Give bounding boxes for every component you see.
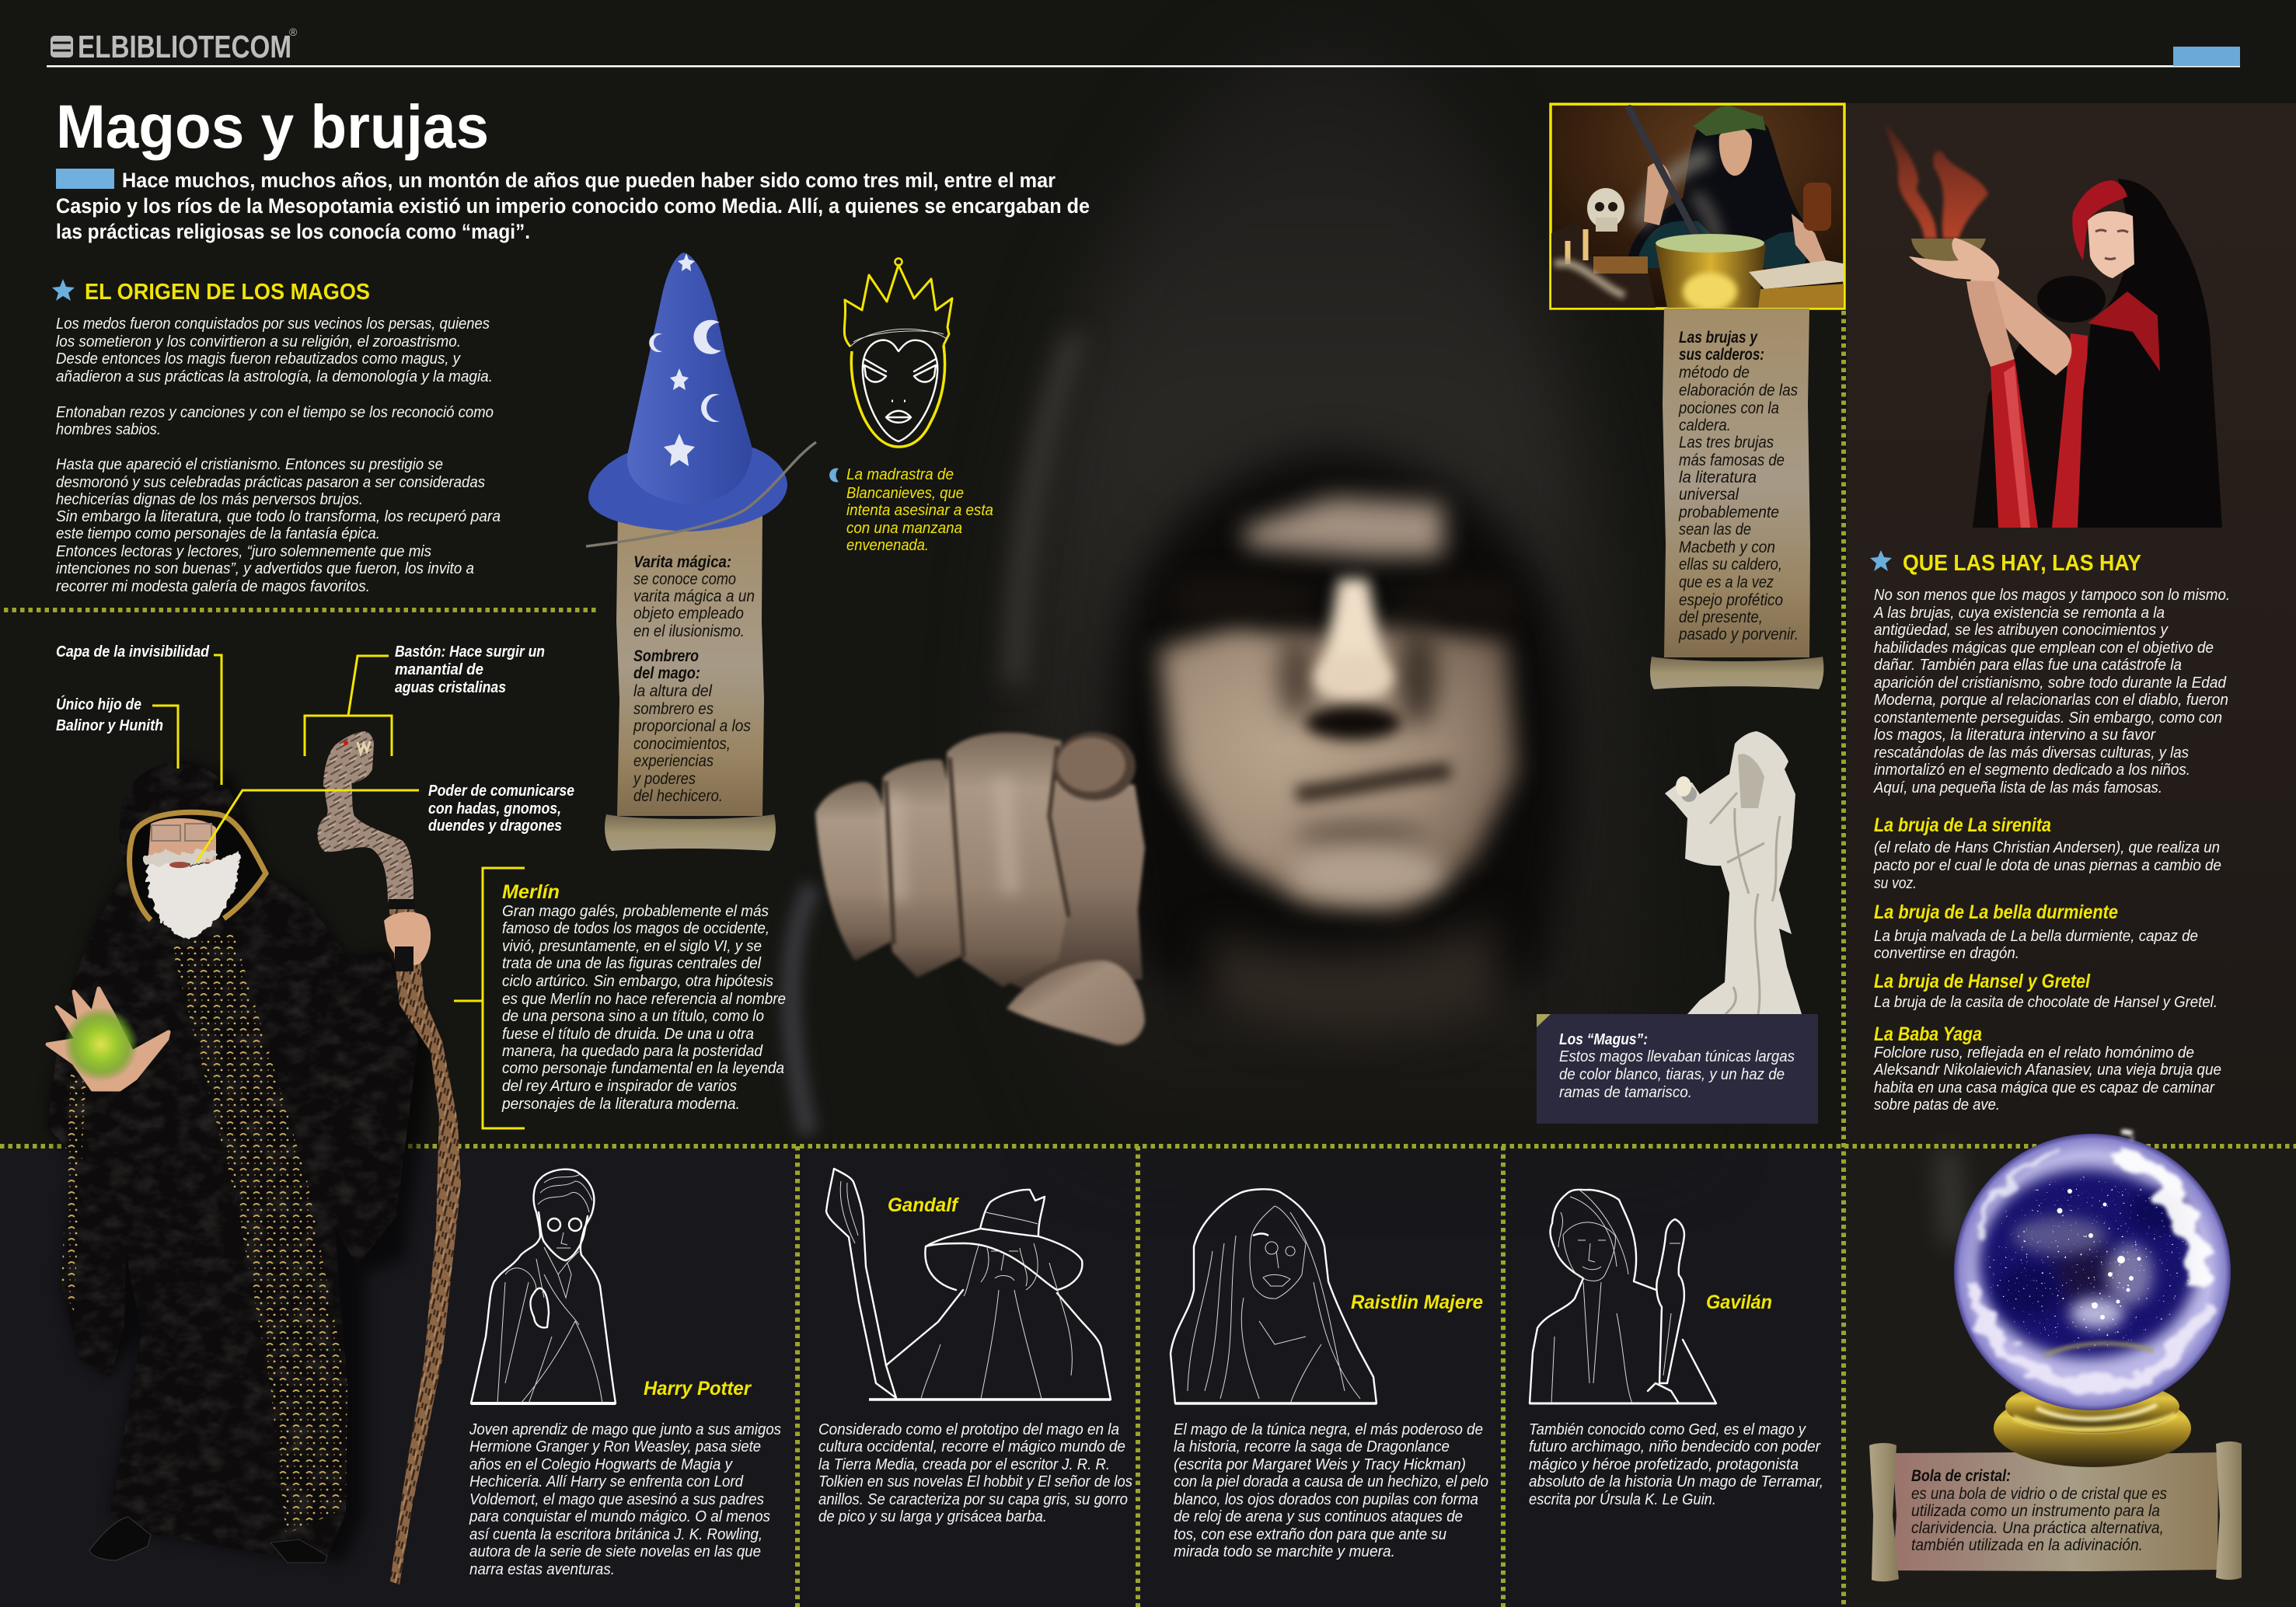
photo: white magus statue xyxy=(1665,731,1802,1014)
hood opening and trim xyxy=(130,812,266,920)
bun xyxy=(2037,276,2106,322)
callout: poder: duendes y dragones xyxy=(428,817,562,835)
thumb and palm under xyxy=(972,777,1145,995)
text: raistlin xyxy=(1174,1421,1488,1560)
header rule and blue tab xyxy=(47,47,2240,67)
scroll: brujas y calderos: que es a la vez xyxy=(1679,573,1774,591)
text: harry potter: Hechicería. Allí Harry se enfrenta con Lord xyxy=(469,1473,744,1490)
heading: que las hay: QUE LAS HAY, LAS HAY xyxy=(1903,551,2141,576)
header logo: ® xyxy=(289,26,298,38)
text: harry potter xyxy=(469,1421,781,1578)
scroll: brujas y calderos: ellas su caldero, xyxy=(1679,556,1782,573)
witch entry: hansel y gretel xyxy=(1874,971,2217,1011)
scroll: bola de cristal xyxy=(1869,1441,2242,1581)
panel: Merlin text with bracket: trata de una de las figuras centrales del xyxy=(502,954,762,972)
scroll: varita magica and sombrero: experiencias xyxy=(633,752,714,770)
text block: witches intro: inmortalizó en el segmento dedicado a los niños. xyxy=(1874,761,2190,779)
arms xyxy=(1970,263,2071,375)
text: raistlin: de reloj de arena y sus continuos ataques de xyxy=(1174,1508,1463,1525)
witch entry: baba yaga: habita en una casa mágica que es capaz de caminar xyxy=(1874,1079,2215,1096)
caption: la madrastra: La madrastra de xyxy=(846,465,954,483)
text: gandalf: anillos. Se caracteriza por su capa gris, su gorro xyxy=(818,1490,1128,1508)
hood xyxy=(1012,39,1687,1142)
icon: wand xyxy=(586,442,816,546)
text: harry potter: Joven aprendiz de mago que junto a sus amigos xyxy=(469,1421,781,1438)
witch entry: baba yaga: Folclore ruso, reflejada en el relato homónimo de xyxy=(1874,1044,2194,1061)
skull xyxy=(1587,188,1624,232)
text: gandalf: la Tierra Media, creada por el escritor J. R. R. xyxy=(818,1455,1110,1473)
callout: capa: Capa de la invisibilidad xyxy=(56,643,209,661)
callout: baston: aguas cristalinas xyxy=(395,678,506,696)
face xyxy=(1159,497,1516,1037)
scroll: brujas y calderos: Las tres brujas xyxy=(1679,434,1774,451)
text: harry potter: Voldemort, el mago que asesinó a sus padres xyxy=(469,1490,764,1508)
panel: Merlin text with bracket: famoso de todos los magos de occidente, xyxy=(502,919,769,937)
cauldron xyxy=(1656,236,1766,308)
caption: la madrastra: intenta asesinar a esta xyxy=(846,501,993,519)
scroll: varita magica and sombrero: se conoce como xyxy=(633,570,736,588)
text: raistlin: tos, con ese extraño don para que ante su xyxy=(1174,1525,1446,1543)
label: raistlin: Raistlin Majere xyxy=(1351,1292,1483,1313)
text block: witches intro: rescatándolas de las más diversas culturas, y las xyxy=(1874,744,2189,762)
text block: witches intro: No son menos que los magos y tampoco son lo mismo. xyxy=(1874,586,2230,604)
text block: origin of magi: Sin embargo la literatura, que todo lo transforma, los recuperó para xyxy=(56,507,501,525)
text block: witches intro: constantemente perseguidas. Sin embargo, como con xyxy=(1874,709,2222,727)
photo: witch with cauldron xyxy=(1551,104,1847,310)
intro paragraph: las prácticas religiosas se los conocía como “magi”. xyxy=(56,220,530,243)
scroll: varita magica and sombrero: del hechicero. xyxy=(633,787,723,805)
text block: origin of magi: Los medos fueron conquistados por sus vecinos los persas, quienes xyxy=(56,315,490,333)
text block: witches intro: Moderna, porque al relacionarlas con el diablo, fueron xyxy=(1874,691,2228,709)
robe xyxy=(47,761,418,1560)
text block: witches intro: dañar. También para ellas fue una catástrofe la xyxy=(1874,656,2182,674)
scroll: bola de cristal: utilizada como un instrumento para la xyxy=(1911,1502,2160,1520)
smoke xyxy=(1884,121,1988,239)
text: harry potter: autora de la serie de siete novelas en las que xyxy=(469,1543,761,1560)
panel: Merlin text with bracket: Gran mago galés, probablemente el más xyxy=(502,902,769,920)
text block: witches intro: antigüedad, se les atribuyen conocimientos y xyxy=(1874,621,2169,639)
wizard shadow xyxy=(47,761,435,1562)
witch entry: hansel y gretel: La bruja de la casita de chocolate de Hansel y Gretel. xyxy=(1874,993,2217,1011)
witch entry: baba yaga xyxy=(1872,1023,2221,1114)
line art: Gandalf xyxy=(826,1169,1111,1400)
text: gavilan xyxy=(1529,1421,1823,1508)
hood and cape xyxy=(2078,179,2222,528)
callout box: los magus: ramas de tamarisco. xyxy=(1559,1083,1692,1101)
crystal ball stand xyxy=(1994,1380,2191,1467)
text block: origin of magi xyxy=(56,315,501,595)
title: Magos y brujas xyxy=(56,92,489,161)
sleeve highlight xyxy=(791,886,812,1135)
scroll: varita magica and sombrero: del mago: xyxy=(633,664,700,682)
text: gavilan: escrita por Úrsula K. Le Guin. xyxy=(1529,1490,1716,1508)
panel: Merlin text with bracket: ciclo artúrico. Sin embargo, otra hipótesis xyxy=(502,972,773,990)
callout: poder xyxy=(428,782,574,835)
scroll: brujas y calderos: espejo profético xyxy=(1679,591,1783,609)
panel: Merlin text with bracket: como personaje fundamental en la leyenda xyxy=(502,1059,784,1077)
red dress xyxy=(1991,333,2088,528)
witch entry: la sirenita: su voz. xyxy=(1874,874,1917,892)
table items xyxy=(1551,221,1656,308)
text block: origin of magi: Entonaban rezos y canciones y con el tiempo se los reconoció como xyxy=(56,403,494,421)
line art: Gavilan xyxy=(1530,1189,1716,1403)
scroll: varita magica and sombrero: en el ilusionismo. xyxy=(633,622,745,640)
shoes xyxy=(89,1517,151,1560)
text: raistlin: El mago de la túnica negra, el más poderoso de xyxy=(1174,1421,1483,1438)
scroll: brujas y calderos: elaboración de las xyxy=(1679,382,1798,399)
caption: la madrastra: con una manzana xyxy=(846,519,962,537)
line art: evil queen xyxy=(844,258,952,447)
scroll: brujas y calderos: caldera. xyxy=(1679,417,1731,434)
callout box: los magus: Los “Magus”: xyxy=(1559,1030,1648,1048)
panel: Merlin text with bracket: Merlín xyxy=(502,881,560,903)
text: gavilan: futuro archimago, niño bendecido con poder xyxy=(1529,1438,1821,1455)
text: harry potter: años en el Colegio Hogwarts de Magia y xyxy=(469,1455,734,1473)
panel: Merlin text with bracket: vivió, presuntamente, en el siglo VI, y se xyxy=(502,937,762,955)
callout lines xyxy=(152,655,419,862)
line art: Raistlin Majere xyxy=(1171,1189,1377,1403)
book xyxy=(1749,260,1847,289)
scroll: brujas y calderos: pociones con la xyxy=(1678,399,1779,417)
icon: blue wizard hat with wand xyxy=(588,253,787,532)
scroll: bola de cristal: clarividencia. Una práctica alternativa, xyxy=(1911,1519,2164,1537)
text: gandalf xyxy=(818,1421,1132,1525)
text: harry potter: así cuenta la escritora británica J. K. Rowling, xyxy=(469,1525,762,1543)
scroll: brujas y calderos: del presente, xyxy=(1679,608,1763,626)
scroll: brujas y calderos xyxy=(1650,309,1823,689)
bowl xyxy=(1911,239,1986,266)
label: harry potter: Harry Potter xyxy=(644,1378,752,1400)
stirring pole xyxy=(1628,106,1705,252)
panel: Merlin text with bracket: es que Merlín no hace referencia al nombre xyxy=(502,990,786,1008)
gold sequin panel xyxy=(172,931,347,1534)
witch entry: baba yaga: Aleksandr Nikolaievich Afanasiev, una vieja bruja que xyxy=(1872,1061,2221,1079)
scroll: brujas y calderos: pasado y porvenir. xyxy=(1678,626,1799,643)
text block: witches intro xyxy=(1872,586,2230,797)
panel: Merlin text with bracket: del rey Arturo e inspirador de varios xyxy=(502,1077,737,1095)
hand with glow xyxy=(47,988,169,1089)
text block: witches intro: los magos, la literatura intervino a su favor xyxy=(1874,726,2156,744)
text: raistlin: con la piel dorada a causa de un hechizo, el pelo xyxy=(1174,1473,1488,1490)
witch entry: la sirenita: pacto por el cual le dota de unas piernas a cambio de xyxy=(1873,856,2221,874)
scroll: brujas y calderos: probablemente xyxy=(1678,504,1779,521)
scroll: brujas y calderos: sean las de xyxy=(1679,521,1751,539)
callout: unico hijo xyxy=(56,695,163,734)
panel: Merlin text with bracket xyxy=(454,868,786,1128)
panel: Merlin text with bracket: fuese el título de druida. De una u otra xyxy=(502,1025,754,1043)
intro paragraph: Caspio y los ríos de la Mesopotamia existió un imperio conocido como Media. Allí, a quienes se encargaban de xyxy=(56,194,1090,218)
callout: baston: manantial de xyxy=(395,661,483,678)
witch entry: la bella durmiente: convertirse en dragón. xyxy=(1874,944,2019,962)
text block: origin of magi: Entonces lectoras y lectores, “juro solemnemente que mis xyxy=(56,542,431,560)
callout: baston: Bastón: Hace surgir un xyxy=(395,643,545,661)
cape lower xyxy=(1973,342,2083,528)
scroll: brujas y calderos: método de xyxy=(1679,364,1750,382)
text: gandalf: Considerado como el prototipo del mago en la xyxy=(818,1421,1119,1438)
text: gandalf: Tolkien en sus novelas El hobbit y El señor de los xyxy=(818,1473,1132,1490)
scroll: varita magica and sombrero: varita mágica a un xyxy=(633,587,755,605)
panel: Merlin text with bracket: personajes de la literatura moderna. xyxy=(501,1095,740,1113)
face xyxy=(148,818,216,864)
panel: Merlin text with bracket: de una persona sino a un título, como lo xyxy=(502,1007,764,1025)
beard xyxy=(147,852,239,939)
label: gandalf: Gandalf xyxy=(888,1194,960,1216)
text block: origin of magi: Hasta que apareció el cristianismo. Entonces su prestigio se xyxy=(56,455,443,473)
witch entry: baba yaga: sobre patas de ave. xyxy=(1874,1096,2000,1114)
line art: Harry Potter xyxy=(471,1170,616,1403)
caption: la madrastra: Blancanieves, que xyxy=(846,484,964,502)
text: raistlin: blanco, los ojos dorados con pupilas con forma xyxy=(1174,1490,1478,1508)
text block: origin of magi: recorrer mi modesta galería de magos favoritos. xyxy=(56,577,370,595)
text block: witches intro: aparición del cristianismo, sobre todo durante la Edad xyxy=(1874,674,2227,692)
text block: origin of magi: intenciones no son buenas”, y advertidos que fueron, los invito a xyxy=(56,559,474,577)
scroll: brujas y calderos: universal xyxy=(1679,486,1739,504)
face and wreath xyxy=(1719,127,1752,176)
face xyxy=(2088,211,2134,278)
text: gavilan: mágico y héroe profetizado, protagonista xyxy=(1529,1455,1799,1473)
text block: origin of magi: desmoronó y sus celebradas prácticas pasaron a ser consideradas xyxy=(56,473,485,491)
photo: witch in red with bowl xyxy=(1884,121,2222,528)
photo: hooded figure pointing xyxy=(791,39,1687,1142)
intro paragraph: Hace muchos, muchos años, un montón de años que pueden haber sido como tres mil, entre el mar xyxy=(122,169,1056,192)
header logo: ELBIBLIOTECOM xyxy=(78,29,291,64)
text block: origin of magi: hombres sabios. xyxy=(56,420,161,438)
caption: la madrastra xyxy=(829,465,993,554)
text: harry potter: para conquistar el mundo mágico. O al menos xyxy=(469,1508,770,1525)
text: harry potter: narra estas aventuras. xyxy=(469,1560,615,1578)
text: gavilan: absoluto de la historia Un mago de Terramar, xyxy=(1529,1473,1823,1490)
panel: Merlin text with bracket: manera, ha quedado para la posteridad xyxy=(502,1042,763,1060)
scroll: bola de cristal: también utilizada en la adivinación. xyxy=(1911,1536,2143,1554)
callout: baston xyxy=(395,643,545,696)
scroll: brujas y calderos: más famosas de xyxy=(1679,451,1785,469)
red hair xyxy=(2072,180,2127,260)
text block: witches intro: A las brujas, cuya existencia se remonta a la xyxy=(1872,604,2165,622)
callout box: los magus: Estos magos llevaban túnicas largas xyxy=(1559,1048,1795,1065)
scroll: brujas y calderos: la literatura xyxy=(1679,469,1757,486)
witch entry: la sirenita: La bruja de La sirenita xyxy=(1874,814,2051,836)
red collar xyxy=(2088,291,2160,371)
wizard Merlin figure xyxy=(47,761,435,1563)
intro paragraph xyxy=(56,169,1090,243)
text: harry potter: Hermione Granger y Ron Weasley, pasa siete xyxy=(469,1438,761,1455)
text: raistlin: la historia, recorre la saga de Dragonlance xyxy=(1174,1438,1450,1455)
text: raistlin: mirada todo se marchite y muera. xyxy=(1174,1543,1395,1560)
text: raistlin: (escrita por Margaret Weis y Tracy Hickman) xyxy=(1174,1455,1466,1473)
callout box: los magus: de color blanco, tiaras, y un haz de xyxy=(1559,1065,1785,1083)
witch entry: baba yaga: La Baba Yaga xyxy=(1874,1023,1982,1045)
scroll: varita magica and sombrero: objeto empleado xyxy=(633,605,744,622)
witch entry: la bella durmiente: La bruja malvada de La bella durmiente, capaz de xyxy=(1874,927,2198,945)
text block: origin of magi: añadieron a sus prácticas la astrología, la demonología y la magia. xyxy=(56,368,493,385)
scroll: varita magica and sombrero xyxy=(605,513,776,851)
callout: poder: con hadas, gnomos, xyxy=(428,800,561,817)
scroll: varita magica and sombrero: conocimientos, xyxy=(633,735,731,753)
scroll: varita magica and sombrero: Sombrero xyxy=(633,647,699,665)
scroll: bola de cristal: es una bola de vidrio o de cristal que es xyxy=(1911,1485,2167,1503)
witch entry: la sirenita xyxy=(1873,814,2221,892)
witch entry: la bella durmiente xyxy=(1874,901,2198,962)
text: gandalf: cultura occidental, recorre el mágico mundo de xyxy=(818,1438,1125,1455)
scroll: bola de cristal: Bola de cristal: xyxy=(1911,1467,2011,1485)
text block: origin of magi: este tiempo como personajes de la fantasía épica. xyxy=(56,525,380,542)
text block: origin of magi: los sometieron y los convirtieron a su religión, el zoroastrismo. xyxy=(56,333,461,350)
arms xyxy=(1644,162,1671,225)
scroll: varita magica and sombrero: Varita mágica: xyxy=(633,553,731,571)
callout: unico hijo: Balinor y Hunith xyxy=(56,716,163,734)
wizard staff xyxy=(317,731,461,1584)
witch hair and robe xyxy=(1628,124,1819,264)
text block: origin of magi: hechicerías dignas de los más perversos brujos. xyxy=(56,490,363,508)
text block: origin of magi: Desde entonces los magis fueron rebautizados como magus, y xyxy=(56,350,462,368)
label: gavilan: Gavilán xyxy=(1706,1292,1772,1313)
text: gandalf: de pico y su larga y grisácea barba. xyxy=(818,1508,1047,1525)
callout: poder: Poder de comunicarse xyxy=(428,782,574,800)
scroll: brujas y calderos: sus calderos: xyxy=(1679,346,1764,364)
text: gavilan: También conocido como Ged, es el mago y xyxy=(1529,1421,1807,1438)
caption: la madrastra: envenenada. xyxy=(846,536,929,554)
pointing hand xyxy=(815,732,1145,1045)
scroll: varita magica and sombrero: proporcional a los xyxy=(633,717,751,735)
callout: unico hijo: Único hijo de xyxy=(56,695,141,713)
scroll: brujas y calderos: Macbeth y con xyxy=(1679,539,1775,556)
witch entry: la bella durmiente: La bruja de La bella durmiente xyxy=(1874,901,2118,923)
text block: witches intro: habilidades mágicas que emplean con el objetivo de xyxy=(1874,639,2214,657)
witch entry: hansel y gretel: La bruja de Hansel y Gretel xyxy=(1874,971,2091,992)
smoke xyxy=(1640,155,1710,225)
crystal ball xyxy=(1954,1134,2231,1410)
hood rim light xyxy=(1015,334,1076,684)
scroll: brujas y calderos: Las brujas y xyxy=(1679,329,1758,347)
witch entry: la sirenita: (el relato de Hans Christian Andersen), que realiza un xyxy=(1874,838,2220,856)
text block: witches intro: Aquí, una pequeña lista de las más famosas. xyxy=(1872,779,2162,797)
scroll: varita magica and sombrero: y poderes xyxy=(632,770,696,788)
scroll: varita magica and sombrero: la altura del xyxy=(633,682,713,700)
bottles xyxy=(1803,183,1831,231)
callout box: los magus xyxy=(1537,1014,1818,1124)
heading: el origen de los magos: EL ORIGEN DE LOS MAGOS xyxy=(85,280,370,305)
scroll: varita magica and sombrero: sombrero es xyxy=(633,700,714,718)
